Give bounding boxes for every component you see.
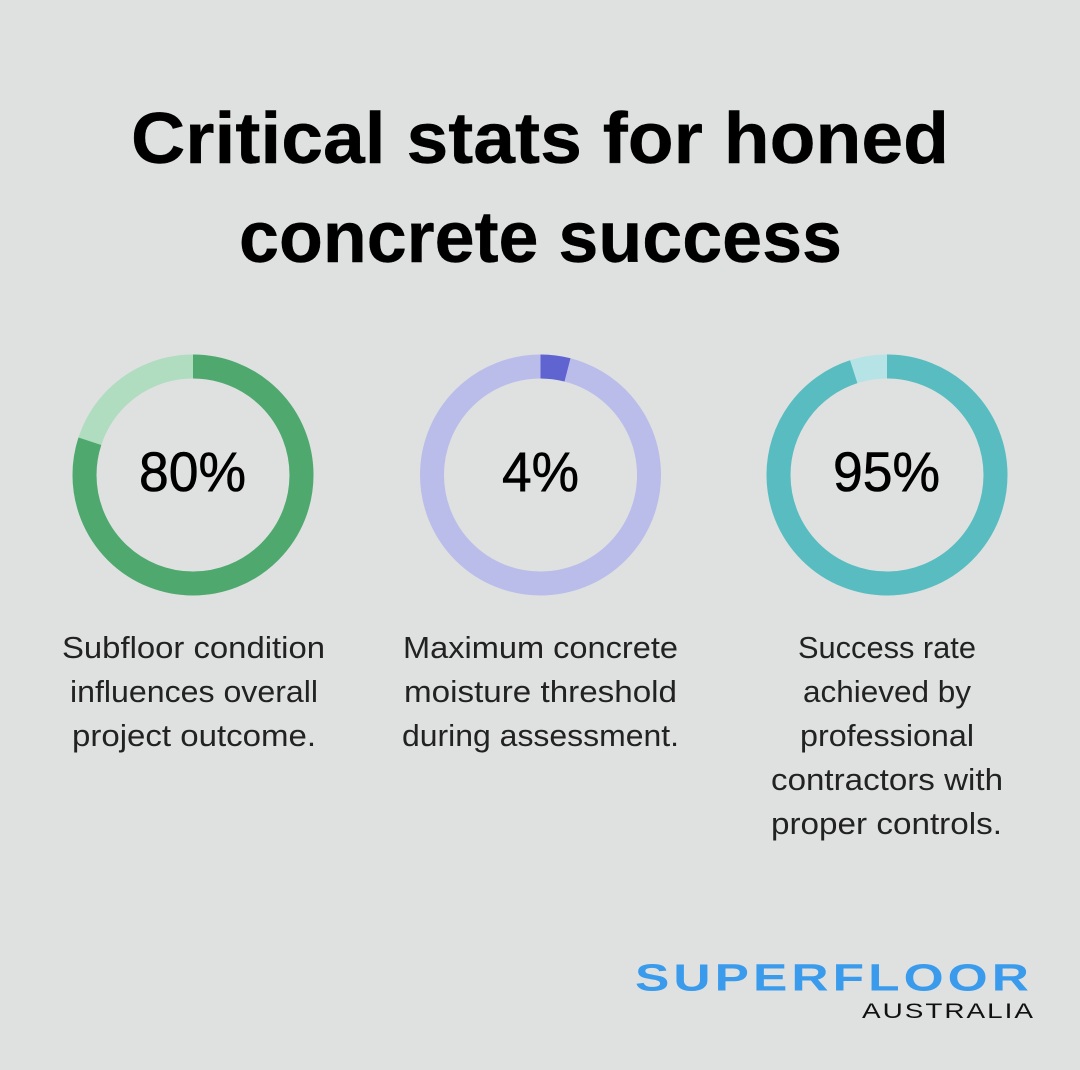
donut chart: 80% (84, 366, 302, 584)
stat value: 4%: 4% (502, 440, 579, 503)
panel: moisture threshold stat (402, 366, 679, 753)
description: moisture threshold: Maximum concrete (403, 630, 678, 665)
description: subfloor condition (62, 630, 325, 753)
description: moisture threshold: during assessment. (402, 718, 679, 753)
description: moisture threshold (402, 630, 679, 753)
logo: Superfloor Australia (635, 958, 1035, 1023)
panel: success rate stat (771, 366, 1003, 841)
description: success rate: Success rate (798, 630, 976, 665)
title: concrete success (239, 198, 842, 278)
description: success rate: professional (800, 718, 974, 753)
stat value: 95%: 95% (833, 440, 940, 503)
logo: Superfloor Australia: AUSTRALIA (862, 1000, 1035, 1023)
panel: subfloor condition stat (62, 366, 325, 753)
logo: Superfloor Australia: SUPERFLOOR (635, 958, 1033, 1000)
description: success rate: achieved by (803, 674, 971, 709)
description: success rate (771, 630, 1003, 841)
description: success rate: contractors with (771, 762, 1003, 797)
title (131, 99, 949, 278)
title: Critical stats for honed (131, 99, 949, 179)
description: subfloor condition: influences overall (70, 674, 318, 709)
donut chart: 95% (778, 366, 996, 584)
description: subfloor condition: Subfloor condition (62, 630, 325, 665)
description: success rate: proper controls. (771, 806, 1002, 841)
description: subfloor condition: project outcome. (72, 718, 316, 753)
donut chart: 4% (432, 366, 649, 584)
description: moisture threshold: moisture threshold (404, 674, 677, 709)
stat value: 80%: 80% (139, 440, 246, 503)
